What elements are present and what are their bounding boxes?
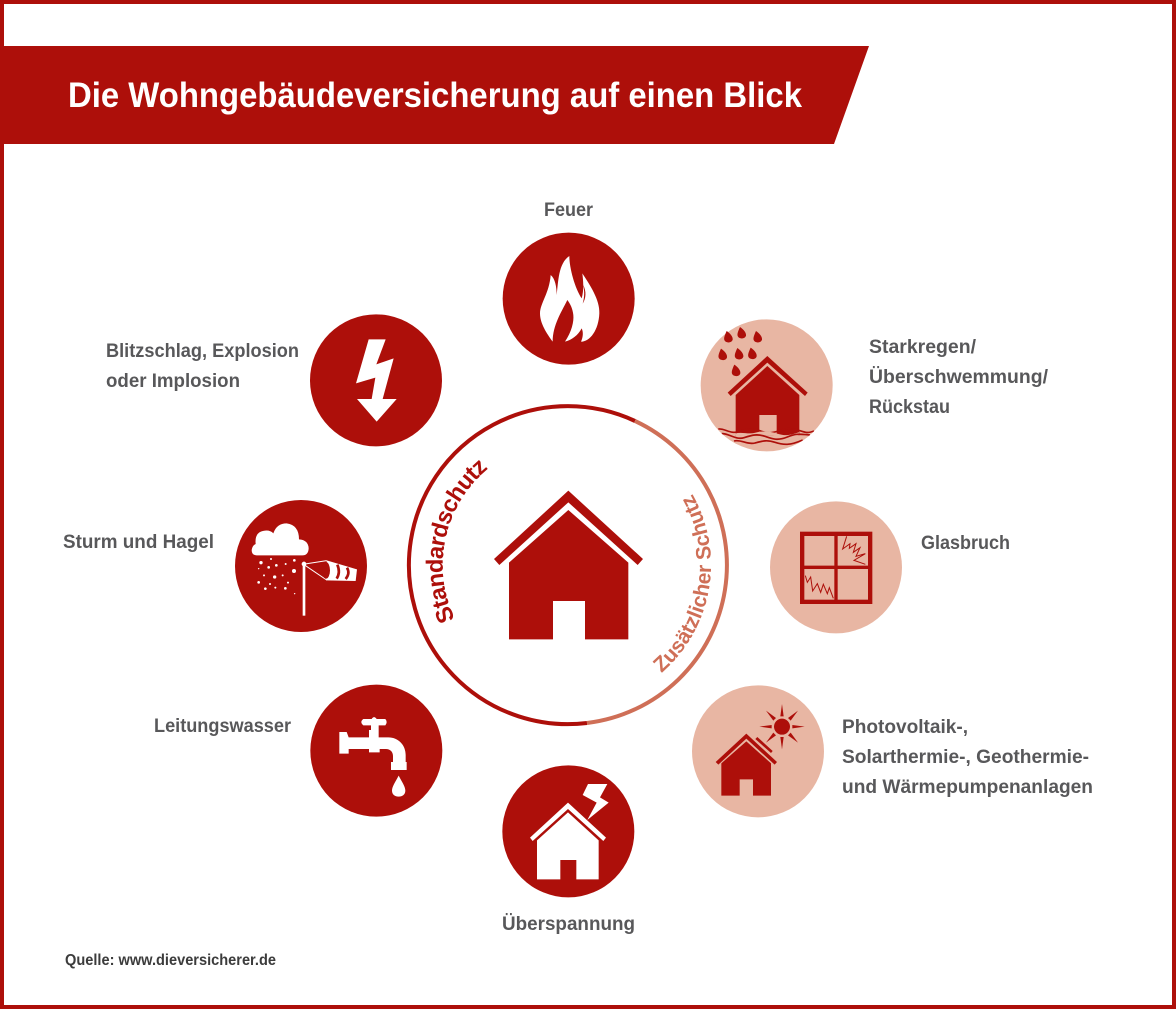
item: Leitungswasser <box>154 685 442 817</box>
curved label: Standardschutz: Standardschutz <box>426 460 488 623</box>
icon: house hit by lightning <box>502 765 634 897</box>
label <box>869 337 1049 418</box>
title banner <box>0 46 869 144</box>
item: Photovoltaik <box>692 685 1093 817</box>
curved label: Zusätzlicher Schutz: Zusätzlicher Schutz <box>652 494 711 673</box>
label <box>842 717 1093 798</box>
label: Starkregen/ <box>869 337 977 358</box>
icon: cloud, hail and windsock <box>235 500 367 632</box>
item: Feuer <box>503 200 635 365</box>
item: Sturm und Hagel <box>63 500 367 632</box>
label: Überspannung <box>502 914 635 935</box>
icon: lightning arrow <box>310 314 442 446</box>
ring: standard protection arc <box>409 406 635 724</box>
icon: flame <box>503 233 635 365</box>
label <box>106 341 299 392</box>
label: Überschwemmung/ <box>869 367 1049 388</box>
icon: house with solar panel and sun <box>692 685 824 817</box>
label: Solarthermie-, Geothermie- <box>842 747 1089 768</box>
item: Überspannung <box>502 765 635 935</box>
icon: central house <box>494 491 643 639</box>
icon: flooded house with rain <box>701 319 833 451</box>
item: Glasbruch <box>770 501 1010 633</box>
label: Leitungswasser <box>154 716 292 737</box>
label: Sturm und Hagel <box>63 532 214 553</box>
label: Feuer <box>544 200 594 221</box>
label: Rückstau <box>869 397 950 418</box>
source note: Quelle: www.dieversicherer.de <box>65 952 276 969</box>
central ring with house <box>406 404 729 726</box>
label: Glasbruch <box>921 533 1010 554</box>
icon: water tap <box>310 685 442 817</box>
label: Photovoltaik-, <box>842 717 968 738</box>
item: Blitzschlag <box>106 314 442 446</box>
title: Die Wohngebäudeversicherung auf einen Blick <box>68 76 802 115</box>
icon: broken window <box>770 501 902 633</box>
label: oder Implosion <box>106 371 240 392</box>
item: Starkregen <box>701 319 1049 451</box>
label: und Wärmepumpenanlagen <box>842 777 1093 798</box>
ring: additional protection arc <box>587 421 727 723</box>
label: Blitzschlag, Explosion <box>106 341 299 362</box>
